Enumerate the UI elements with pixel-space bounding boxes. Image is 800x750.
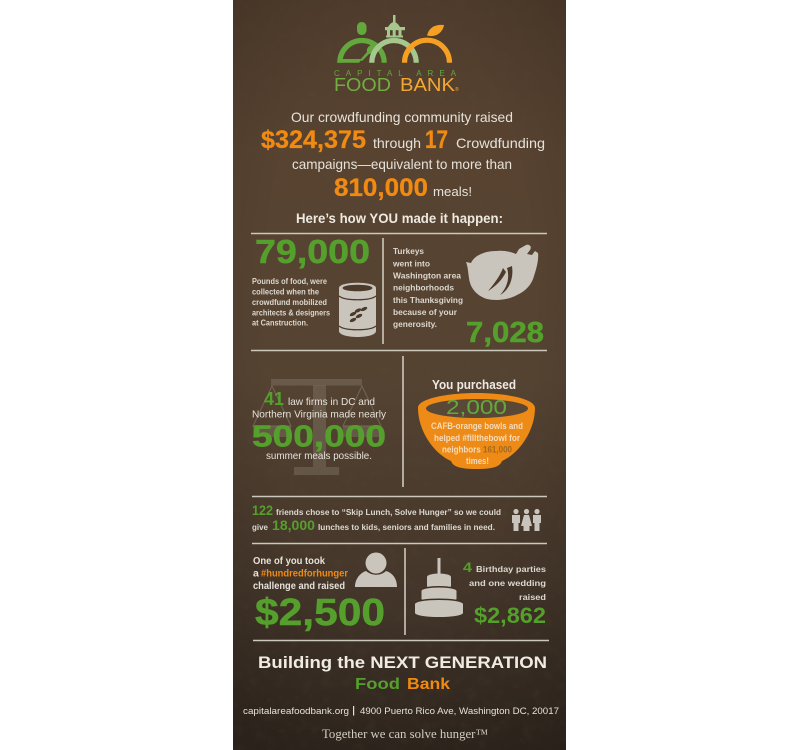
stat: $2,862: $2,862 <box>474 603 546 628</box>
text block: intro: through <box>373 135 421 151</box>
icon: cake <box>415 558 463 617</box>
icon: faint scales of justice <box>253 379 381 475</box>
tagline: Together we can solve hunger™ <box>322 726 488 741</box>
text block: skip lunch line two: give <box>252 522 268 532</box>
text block: bowls description: neighbors 161,000 <box>442 444 512 454</box>
text block: law firms description: Northern Virginia made nearly <box>252 408 387 420</box>
text block: law firms description: law firms in DC and <box>288 396 375 408</box>
heading: building the next generation: Food <box>355 676 400 693</box>
panel: law firms <box>252 379 387 475</box>
text block: intro: 17 <box>425 126 448 154</box>
text block: pounds description: collected when the <box>252 286 319 296</box>
text block: skip lunch line two: lunches to kids, seniors and families in need. <box>318 522 495 532</box>
text block: contact details: capitalareafoodbank.org <box>243 706 349 717</box>
text block: turkeys description: neighborhoods <box>393 282 454 292</box>
text block: intro: 810,000 <box>334 174 428 202</box>
panel: birthday parties <box>415 558 546 628</box>
text block: birthday description: Birthday parties <box>476 564 546 574</box>
logo wordmark <box>334 69 459 95</box>
text block: turkeys description: Turkeys <box>393 246 424 256</box>
text block: turkeys description <box>392 246 463 329</box>
text block: birthday description: raised <box>519 592 546 602</box>
text block: pounds description: crowdfund mobilized <box>252 297 327 307</box>
panel: textured brown background <box>233 0 566 750</box>
panel: orange bowls <box>418 377 535 469</box>
text block: challenge description <box>253 555 348 592</box>
text block: pounds description: at Canstruction. <box>252 318 308 328</box>
stat: 4: 4 <box>463 559 472 575</box>
text block: challenge description: a <box>253 568 259 580</box>
text block: intro <box>261 109 545 202</box>
text block: challenge description: One of you took <box>253 555 325 567</box>
text block: turkeys description: because of your <box>393 307 458 317</box>
icon: three people <box>512 509 541 531</box>
stat: 79,000: 79,000 <box>255 233 370 270</box>
logo wordmark: BANK <box>400 75 455 95</box>
stat: 500,000: 500,000 <box>252 418 386 454</box>
icon: turkey <box>466 245 538 300</box>
text block: bowls description: times! <box>466 456 489 466</box>
text block: skip lunch line two <box>252 517 495 533</box>
text block: pounds description <box>252 276 330 328</box>
text block: bowls description <box>431 421 523 466</box>
logo wordmark: ® <box>455 86 459 93</box>
text block: intro: Crowdfunding <box>456 135 545 151</box>
text block: contact details <box>243 706 559 717</box>
text block: pounds description: Pounds of food, were <box>252 276 327 286</box>
stat: 41: 41 <box>264 389 284 409</box>
text block: turkeys description: this Thanksgiving <box>393 295 463 305</box>
text block: pounds description: architects & designers <box>252 307 330 317</box>
text block: skip lunch line two: 18,000 <box>272 517 315 533</box>
heading: you purchased: You purchased <box>432 377 516 392</box>
logo wordmark: FOOD <box>334 75 391 95</box>
heading: building the next generation: Building the NEXT GENERATION <box>258 653 547 672</box>
logo: Capital Area Food Bank <box>334 15 459 95</box>
stat: $2,500: $2,500 <box>255 592 385 634</box>
text block: challenge description: challenge and raised <box>253 580 345 592</box>
stat: 2,000: 2,000 <box>446 397 507 419</box>
heading: how you made it happen: Here’s how YOU made it happen: <box>296 210 503 226</box>
panel: 79,000 pounds of food <box>252 233 376 337</box>
text block: intro: campaigns—equivalent to more than <box>292 156 512 172</box>
icon: orange bowl <box>418 393 535 469</box>
text block: skip lunch line one: 122 <box>252 502 273 518</box>
text block: intro: meals! <box>433 184 472 199</box>
text block: summer meals: summer meals possible. <box>266 450 372 462</box>
panel: skip lunch <box>252 502 541 533</box>
icon: light green capitol dome arch <box>372 15 416 63</box>
text block: birthday description <box>469 564 546 602</box>
icon: green person arch with spoon <box>338 22 384 63</box>
icon: person <box>355 552 397 587</box>
text block: law firms description <box>252 396 387 420</box>
icon: food can <box>339 283 376 337</box>
icon: orange fruit arch with leaf <box>404 25 450 63</box>
text block: bowls description: CAFB-orange bowls and <box>431 421 523 431</box>
stat: 7,028: 7,028 <box>466 317 544 349</box>
text block: skip lunch line one <box>252 502 501 518</box>
panel: 7,028 turkeys <box>392 245 544 349</box>
text block: bowls description: helped #fillthebowl for <box>434 433 520 443</box>
text block: challenge description: #hundredforhunger <box>261 568 348 580</box>
panel: hundred for hunger <box>253 552 397 634</box>
text block: skip lunch line one: friends chose to “Skip Lunch, Solve Hunger” so we could <box>276 507 501 517</box>
text block: intro: $324,375 <box>261 126 366 154</box>
text block: contact details: 4900 Puerto Rico Ave, Washington DC, 20017 <box>360 706 559 717</box>
heading: building the next generation <box>258 653 547 693</box>
logo wordmark: CAPITAL AREA <box>334 69 457 78</box>
text block: turkeys description: generosity. <box>393 319 437 329</box>
heading: building the next generation: Bank <box>407 676 450 693</box>
text block: birthday description: and one wedding <box>469 578 546 588</box>
text block: turkeys description: Washington area <box>393 270 461 280</box>
text block: intro: Our crowdfunding community raised <box>291 109 513 125</box>
text block: turkeys description: went into <box>392 258 430 268</box>
